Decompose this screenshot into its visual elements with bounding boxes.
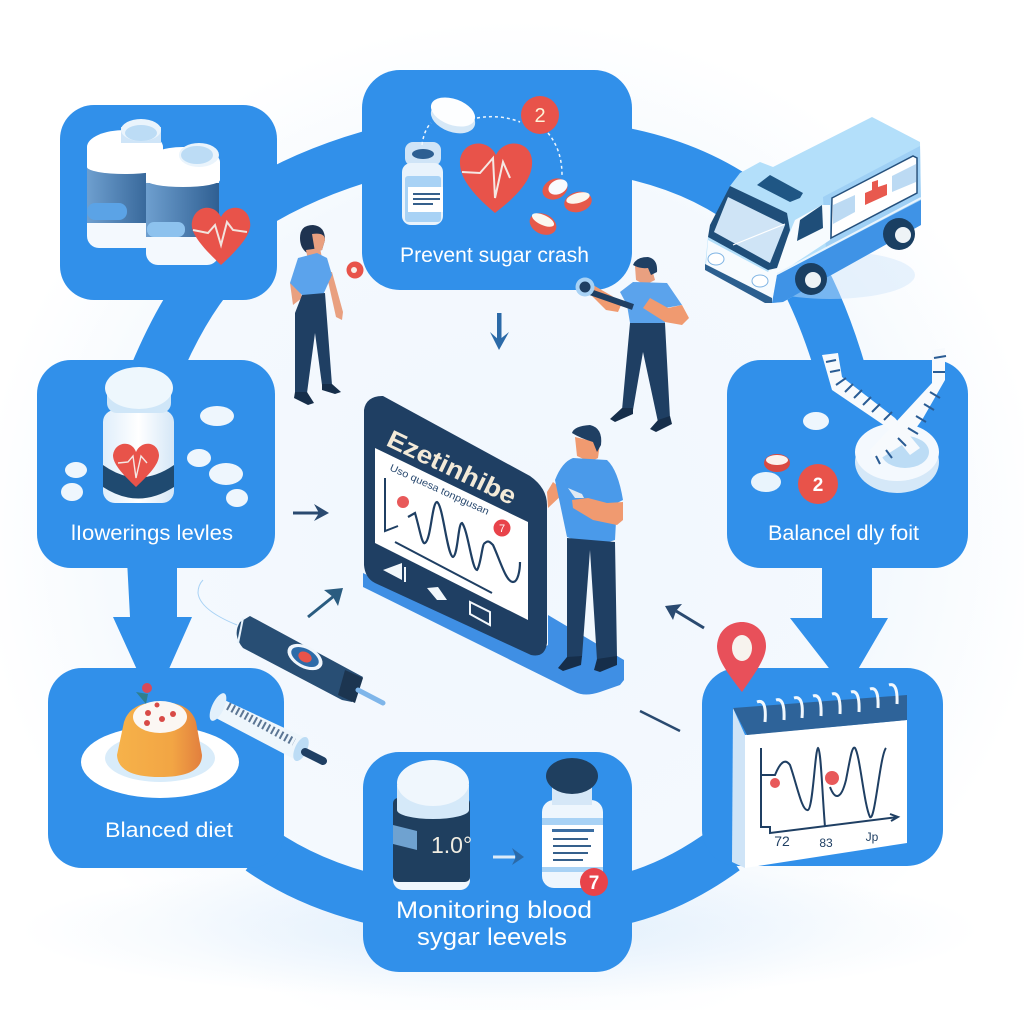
badge: 2	[798, 464, 838, 504]
screen badge: 7	[499, 523, 505, 535]
line chart	[761, 748, 898, 850]
icon: small arrow	[493, 848, 524, 865]
cycle ring	[150, 150, 842, 901]
icon: plate with cake	[81, 683, 239, 798]
icon: front bottle	[146, 143, 220, 265]
screen badge	[494, 520, 510, 536]
badge: 2: 2	[813, 475, 823, 496]
icon: pills	[526, 174, 594, 239]
icon: glucose pen	[198, 580, 383, 703]
person: man at monitor	[547, 425, 623, 672]
screen controls	[383, 563, 490, 625]
line chart: Jp	[866, 830, 879, 844]
icon: tablet ring	[855, 423, 939, 493]
panel label: Balancel dly foit	[768, 522, 919, 545]
central monitor device	[363, 396, 624, 694]
icon: tablets	[61, 406, 248, 507]
panel: balanced daily	[727, 348, 968, 568]
panel: lowering levels	[37, 360, 275, 568]
panel label	[396, 897, 592, 951]
badge: 7: 7	[589, 873, 599, 894]
icon: calendar	[732, 685, 907, 868]
line chart: 72	[774, 833, 790, 849]
arrow: diagonal up right	[308, 588, 343, 617]
panel label: lIowerings levles	[71, 522, 233, 545]
screen title: Ezetinhibe	[382, 425, 521, 511]
icon: jar	[393, 760, 472, 890]
person: woman	[290, 225, 343, 405]
icon: pills	[751, 412, 829, 492]
screen chart	[385, 478, 520, 593]
arrow: left panel to diet panel	[113, 560, 192, 705]
panel: balanced diet	[48, 668, 284, 868]
badge: small red	[346, 262, 364, 278]
panel label: sygar leevels	[417, 924, 567, 951]
icon: medicine bottle	[402, 142, 443, 225]
badge: 2	[521, 96, 559, 134]
person: man with scope	[576, 257, 689, 432]
arrow: right panel to calendar panel	[790, 560, 888, 690]
badge: 7	[580, 868, 608, 896]
icon: syringe	[206, 691, 323, 763]
ambulance	[705, 117, 921, 303]
icon: measuring tape	[822, 348, 946, 464]
panel label: Monitoring blood	[396, 897, 592, 924]
arrow: down	[490, 313, 509, 350]
panel label: Blanced diet	[105, 819, 233, 842]
icon: map pin	[717, 622, 766, 692]
icon: heart	[460, 144, 532, 213]
icon: jar: 1.0°	[431, 832, 472, 858]
badge: 2: 2	[534, 105, 546, 127]
icon: pill bottle with heart	[103, 367, 174, 503]
arrow: dash	[640, 711, 680, 731]
icon: vial	[542, 758, 603, 888]
panel: monitoring	[363, 752, 632, 972]
icon: back bottle	[87, 119, 163, 248]
arrow: right	[293, 504, 329, 521]
panel: prevent sugar crash	[362, 70, 632, 290]
line chart: 83	[819, 836, 833, 850]
icon: heart	[192, 208, 250, 265]
panel: supplements top left	[60, 105, 277, 300]
icon: tablet	[427, 92, 479, 139]
panel: calendar	[702, 622, 943, 868]
screen subtitle: Uso quesa tonpgusan	[388, 463, 491, 518]
panel label: Prevent sugar crash	[400, 244, 589, 267]
arrow: diagonal up left	[665, 604, 704, 628]
